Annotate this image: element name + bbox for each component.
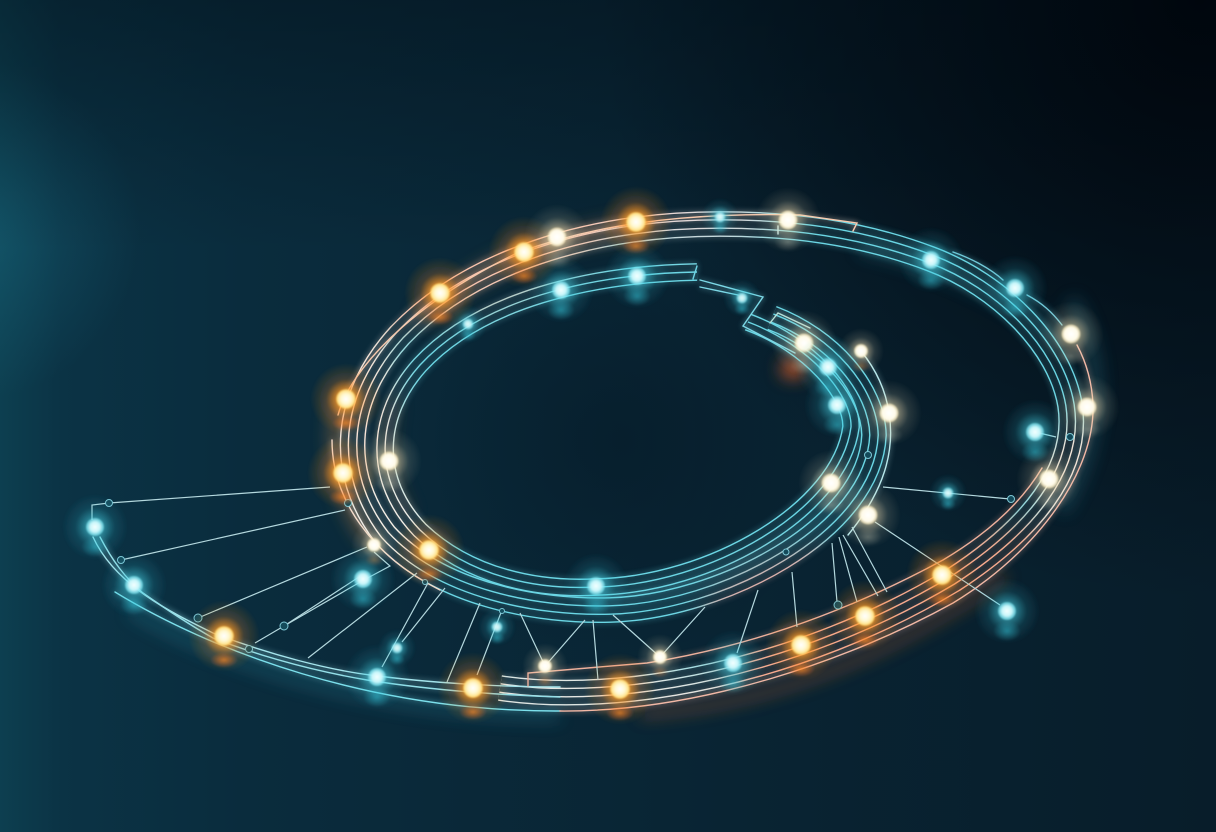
outermost lower track	[115, 592, 560, 711]
inner spiral band	[372, 260, 864, 600]
separate outlying tracks	[93, 215, 1093, 711]
upper stepped track	[528, 468, 1042, 686]
connector spokes	[92, 432, 1056, 682]
floor glow under the rings	[130, 226, 1095, 716]
cyan light nodes	[62, 198, 1068, 710]
small junction dots	[106, 434, 1074, 652]
spiral rings	[0, 0, 1097, 716]
line by outer right node	[848, 351, 891, 535]
tail tracks	[93, 537, 560, 687]
notch lines	[693, 266, 697, 279]
short top-right tracks	[953, 252, 1003, 280]
orange light nodes	[188, 186, 978, 725]
warm white light nodes	[351, 187, 1120, 689]
outermost upper-left track	[338, 215, 857, 415]
main spiral band	[336, 208, 1088, 710]
